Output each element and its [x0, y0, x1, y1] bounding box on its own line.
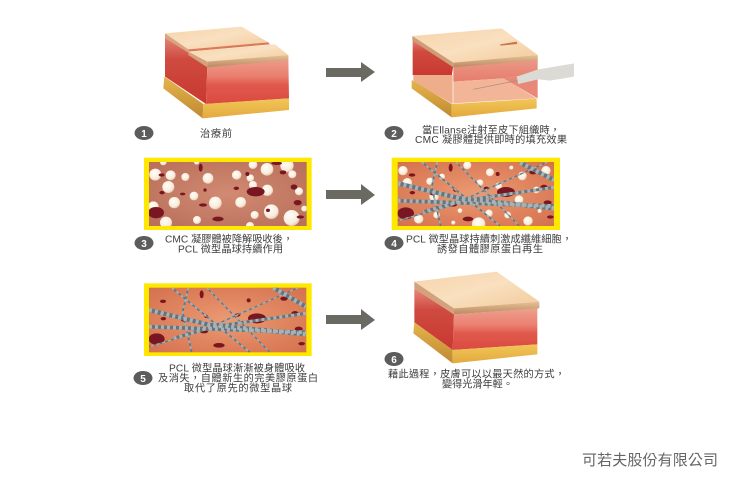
arrow: step 1 to step 2 — [326, 62, 375, 82]
panel: step 3 microscope view — [144, 158, 312, 230]
caption: step 4: PCL 微型晶球持續刺激成纖維細胞， — [406, 232, 572, 246]
caption: step 3: PCL 微型晶球持續作用 — [178, 242, 283, 256]
arrow: step 5 to step 6 — [326, 309, 375, 330]
caption: step 6: 藉此過程，皮膚可以以最天然的方式， — [388, 368, 565, 380]
panel: step 4 fibroblast view — [392, 158, 560, 231]
caption: step 2: 2 — [391, 129, 397, 140]
caption: step 1: 1 — [141, 129, 147, 140]
caption: step 5 — [134, 362, 318, 394]
caption: step 1 — [134, 126, 232, 140]
caption: step 6: 變得光滑年輕。 — [442, 378, 513, 390]
caption: step 3 — [134, 232, 293, 256]
caption: step 5: 取代了原先的微型晶球 — [184, 382, 292, 394]
caption: step 4: 誘發自體膠原蛋白再生 — [437, 242, 543, 256]
panel: step 5 collagen view — [144, 283, 312, 356]
caption: step 2: CMC 凝膠體提供即時的填充效果 — [415, 133, 567, 146]
company name: 可若夫股份有限公司 — [582, 452, 718, 469]
illustration: skin block during injection — [412, 28, 574, 117]
caption: step 2: 當Ellanse注射至皮下組織時， — [422, 124, 560, 136]
illustration: skin block after treatment — [413, 272, 539, 363]
caption: step 5: PCL 微型晶球漸漸被身體吸收 — [169, 362, 305, 374]
arrow: step 3 to step 4 — [326, 184, 375, 205]
caption: step 3: CMC 凝膠體被降解吸收後， — [165, 232, 293, 246]
caption: step 6: 6 — [391, 355, 397, 366]
caption: step 4 — [384, 232, 572, 256]
caption: step 1: 治療前 — [200, 127, 232, 140]
caption: step 3: 3 — [141, 239, 147, 250]
caption: step 4: 4 — [391, 239, 397, 250]
caption: step 6 — [384, 352, 565, 390]
illustration: skin block before treatment — [163, 27, 289, 118]
caption: step 2 — [384, 124, 567, 146]
caption: step 5: 及消失，自體新生的完美膠原蛋白 — [158, 372, 318, 384]
caption: step 5: 5 — [140, 374, 146, 385]
